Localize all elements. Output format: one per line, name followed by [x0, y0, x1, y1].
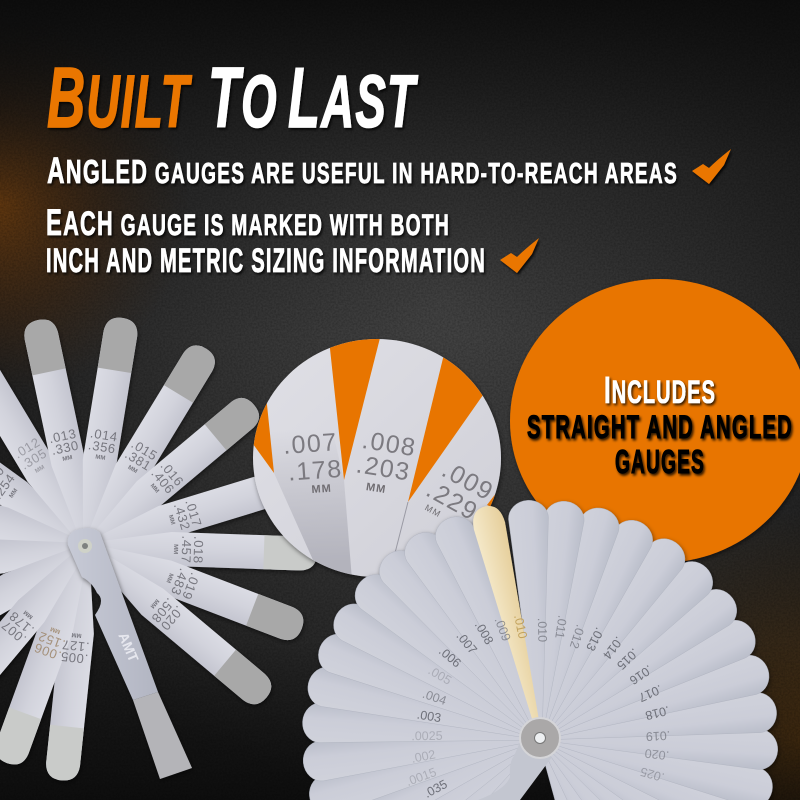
magnified marking .009: MM — [423, 502, 443, 519]
blade markings: .018 — [190, 536, 206, 564]
text: marking line 2: INCH AND METRIC SIZING INFORMATION — [46, 242, 486, 280]
blade markings: .178 — [6, 608, 37, 638]
magnified marking .008 — [352, 426, 418, 500]
blade markings: .013 — [583, 625, 607, 653]
blade markings: .008 — [472, 619, 496, 647]
blade markings: .011 — [552, 614, 570, 640]
blade markings: MM — [50, 625, 61, 634]
blade markings: .013 — [48, 426, 78, 446]
title: BUILT — [47, 51, 192, 146]
blade markings: .015 — [614, 645, 641, 672]
blade markings: MM — [164, 572, 174, 584]
blade markings: .152 — [36, 629, 67, 652]
icon: check mark 1 — [692, 149, 731, 184]
blade markings: .007 — [453, 629, 480, 657]
blade markings: MM — [9, 488, 19, 499]
magnified marking .007: .007 — [282, 428, 339, 460]
blade markings: MM — [167, 514, 175, 526]
title — [47, 51, 418, 146]
blade markings: .020 — [644, 746, 670, 763]
blade markings: MM — [95, 454, 106, 462]
text: marking line 1: EACH GAUGE IS MARKED WITH BOTH — [46, 202, 450, 243]
handle: AMT — [115, 630, 142, 665]
blade markings: MM — [62, 455, 73, 463]
blade markings: .381 — [122, 447, 154, 474]
blade markings: .019 — [645, 728, 671, 743]
blade markings: .305 — [18, 445, 49, 473]
blade markings: MM — [23, 609, 35, 620]
blade markings: .483 — [168, 566, 192, 598]
blade markings: .016 — [158, 458, 187, 489]
blade markings: .012 — [11, 434, 43, 461]
blade markings: MM — [34, 465, 46, 475]
blade markings: .009 — [492, 615, 513, 643]
right gauge fan — [301, 499, 779, 800]
blade markings: .020 — [158, 603, 187, 634]
magnified gauge circle — [245, 330, 501, 580]
blade markings: .0015 — [404, 765, 438, 789]
magnified marking .009: .009 — [437, 456, 499, 507]
magnified marking .008: .203 — [354, 450, 413, 487]
blade markings — [404, 613, 671, 800]
blade markings: .016 — [627, 662, 655, 687]
blade shading — [270, 444, 352, 574]
rivet — [520, 718, 560, 758]
magnified marking .007 — [282, 428, 344, 498]
magnified marking .008: .008 — [360, 426, 418, 462]
blade markings: MM — [149, 597, 160, 609]
blade markings: .019 — [179, 571, 203, 602]
callout line 1: INCLUDES — [604, 370, 716, 412]
blade markings: .010 — [511, 613, 530, 640]
icon: check mark 2 — [500, 238, 539, 273]
blades — [0, 315, 317, 782]
magnified marking .009: .229 — [422, 475, 483, 526]
orange callout circle — [510, 279, 800, 563]
magnified marking .007: .178 — [287, 455, 344, 487]
blade markings: .006 — [32, 640, 63, 664]
handle — [478, 742, 552, 800]
blade markings: .457 — [178, 535, 194, 564]
blade markings: .014 — [89, 425, 119, 445]
blade markings: .406 — [148, 466, 178, 497]
blade markings: MM — [149, 483, 160, 495]
blade markings: MM — [71, 631, 82, 638]
handle — [68, 528, 192, 779]
left gauge fan — [0, 315, 317, 782]
blade markings: .025 — [639, 764, 666, 784]
blade markings: .004 — [421, 687, 448, 708]
magnified marking .009 — [417, 454, 499, 536]
blade markings: .356 — [87, 437, 117, 456]
blade markings: .017 — [182, 498, 205, 529]
orange gaps — [254, 339, 496, 506]
blade markings: .005 — [60, 649, 89, 667]
blade tips — [0, 315, 317, 782]
blade markings: .006 — [436, 644, 464, 670]
callout line 3: GAUGES — [615, 443, 705, 480]
blade markings: .0025 — [411, 729, 443, 743]
blade markings: .005 — [426, 663, 454, 688]
magnified marking .007: MM — [311, 483, 332, 496]
title: TO LAST — [208, 51, 418, 146]
blade markings: MM — [126, 465, 138, 475]
blade markings: .002 — [410, 747, 437, 766]
blade markings: .432 — [171, 501, 193, 532]
brass blade — [469, 503, 556, 742]
blade markings: .015 — [129, 436, 160, 463]
blade markings: .508 — [148, 595, 178, 626]
blade markings: .014 — [600, 634, 626, 662]
magnified marking .008: MM — [365, 481, 387, 496]
blade markings: .003 — [416, 708, 442, 725]
blade markings — [0, 425, 206, 667]
blade markings: .010 — [535, 618, 549, 642]
blade markings: .017 — [636, 682, 664, 705]
blades — [301, 499, 779, 800]
blade markings: .018 — [644, 703, 671, 723]
blade markings: MM — [172, 544, 178, 554]
blade markings: .330 — [50, 437, 80, 458]
blade markings: .012 — [567, 623, 588, 650]
blade markings: .127 — [61, 637, 90, 655]
